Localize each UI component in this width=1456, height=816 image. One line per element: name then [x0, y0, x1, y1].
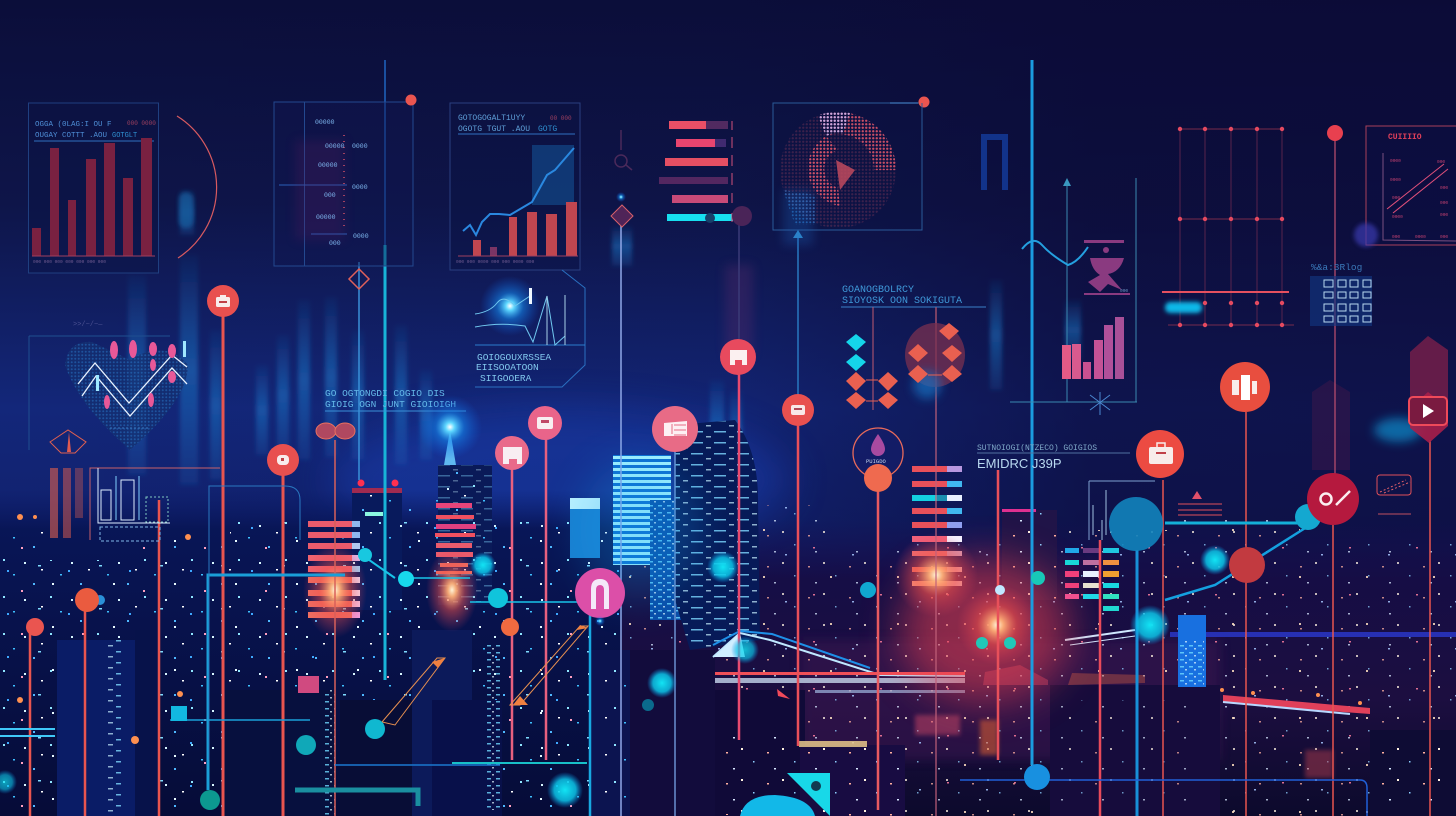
trend lines: [1387, 164, 1448, 213]
table cells: [1324, 280, 1371, 322]
combo labels: 000 000 0000 000 000 0000 000: [456, 259, 535, 265]
combo line: [463, 148, 574, 235]
scale labels: 0000: [352, 143, 368, 150]
panel: radial chart: [773, 96, 930, 245]
scale labels: 0000: [352, 184, 368, 191]
trend labels: 000: [1392, 234, 1400, 240]
small pink gate icon: [298, 676, 319, 693]
caption right of center: SUTNOIOGI(NTZECO) GOIGIOS: [977, 444, 1097, 453]
red disc: [1229, 547, 1265, 583]
horizontal bar list: [659, 121, 752, 226]
pin icon: badge: [267, 444, 299, 476]
diamond marker left: [349, 269, 369, 289]
signal lines: [475, 296, 530, 314]
panel: line and column chart: 000: [1120, 288, 1128, 294]
chart 1 heading: OGGA (0LAG:I OU F: [35, 121, 112, 129]
trend heading: CUIIIIO: [1388, 133, 1422, 142]
table heading: %&a:3Rlog: [1311, 262, 1362, 273]
pink columns: [1062, 317, 1124, 379]
scale labels: 00000: [325, 143, 345, 150]
lamp lights: [17, 514, 1362, 705]
pink nodes: [104, 340, 176, 409]
purple water: [800, 640, 1220, 760]
teal wave: [1022, 241, 1088, 265]
cyan pill: [1165, 302, 1202, 313]
stacked bars: left tower: [308, 521, 360, 618]
orange glow: beacon bars: [426, 548, 478, 632]
trend labels: 000: [1440, 212, 1448, 218]
triangle stack icon: [1178, 491, 1222, 515]
blue pill mark: [179, 192, 193, 228]
matrix heading: GOANOGBOLRCY: [842, 285, 914, 296]
panel: heart network: [29, 321, 188, 450]
stacked bars: colored grid: [1065, 548, 1119, 611]
water reflections: [915, 715, 1333, 778]
panel: dot lattice: [1162, 127, 1294, 327]
pin: card pink high: [528, 406, 562, 440]
pin: percent icon: [1307, 473, 1359, 525]
ambient blue glow behind city center: [330, 410, 790, 550]
striped tower: [613, 455, 690, 620]
pin: small orange: [501, 618, 519, 636]
trend labels: 0000: [1390, 177, 1401, 183]
faint background bars: [128, 190, 1081, 485]
mid heading: GIOIG OGN JUNT GIOIOIGH: [325, 399, 456, 410]
lower center towers: [590, 650, 1456, 816]
handwritten label: >>/~/~—: [73, 321, 103, 329]
note card icon: [1377, 475, 1411, 514]
chart 1 heading: GOTGLT: [112, 132, 137, 140]
circuit panel: [98, 468, 170, 541]
combo heading: GOTOGOGALT1UYY: [458, 114, 525, 123]
connector arrow tips: [432, 625, 588, 705]
pin: gate: [720, 339, 756, 375]
chart 1 heading: 000 0000: [127, 120, 156, 127]
panel: vertical scale: [274, 94, 416, 266]
radial inner ring: [808, 136, 840, 206]
central purple glows: [725, 265, 1448, 750]
faint outer disc: [780, 112, 896, 228]
pin dot: [918, 96, 930, 108]
stacked bars: center right: [912, 466, 962, 586]
bridge right: [983, 615, 1456, 714]
mid heading: [325, 388, 456, 410]
gauge and ladder icon: [50, 430, 86, 538]
infinity icon: [316, 423, 355, 439]
combo heading: [458, 114, 572, 134]
radial outer ring: [818, 112, 896, 170]
caption right of center: EMIDRC J39P: [977, 456, 1062, 471]
dim blue legs glyph: [981, 134, 1008, 190]
chart 1 heading: [35, 120, 156, 140]
orange glow: left bars: [303, 542, 367, 638]
radial blue corner: [783, 190, 815, 225]
city lights left: [0, 500, 620, 816]
pin: large left: [75, 588, 99, 612]
signal caption: GOIOGOUXRSSEA: [477, 352, 551, 363]
combo heading: 00 000: [550, 115, 572, 122]
ambient glow center: [580, 460, 700, 600]
stacked bars: beacon tower: [435, 503, 476, 574]
matrix heading: SIOYOSK OON SOKIGUTA: [842, 296, 962, 307]
combo bars: [473, 202, 577, 256]
pin: play hexagon: [1409, 392, 1448, 443]
trend labels: 000: [1440, 234, 1448, 240]
city lights right: [620, 500, 1456, 816]
scale labels: 000: [329, 240, 341, 247]
scale labels: 00000: [315, 119, 335, 126]
city base left: [0, 490, 620, 816]
caption right of center: [977, 444, 1130, 471]
rooftop tower with red lights: [352, 480, 402, 610]
panel: hexagonal signal: [475, 270, 585, 387]
zigzag lines: [78, 355, 187, 416]
panel: line and column chart: [1010, 178, 1137, 415]
heart footer lines: [110, 427, 150, 429]
city base right: [620, 520, 1456, 816]
signal caption: [476, 352, 551, 384]
signal glow: [480, 276, 540, 336]
radial light segment: [818, 112, 850, 136]
arrow up: [793, 230, 803, 238]
pin: droplet ring: [853, 428, 903, 492]
trophy glyph: [1084, 240, 1130, 295]
pin icon: briefcase top-left: [207, 285, 239, 317]
pin: magenta lock: [575, 568, 625, 626]
radial wedge: [836, 160, 855, 190]
pin: card center: [782, 394, 814, 426]
chart 1 heading: OUGAY COTTT .AOU: [35, 132, 107, 140]
panel: trend chart: [1354, 126, 1456, 247]
pin: card pink low: [495, 436, 529, 470]
scale labels: 00000: [316, 214, 336, 221]
bottom-left neon strips: [0, 706, 187, 794]
small panel near blue disc: [1089, 481, 1155, 540]
trend labels: 000: [1440, 185, 1448, 191]
spark ornaments: [1090, 392, 1110, 415]
matrix heading: [842, 285, 962, 307]
pin: droplet ring: PUIGDO: [866, 458, 887, 465]
diamonds: [846, 323, 962, 409]
trend labels: 000: [1437, 159, 1445, 165]
dotted heart: [65, 342, 188, 450]
scale labels: 0000: [353, 233, 369, 240]
pin: bars icon: [1220, 362, 1270, 412]
tall tower with beacon: [438, 430, 492, 605]
trend labels: 0000: [1390, 158, 1401, 164]
cyan nodes: [95, 418, 1422, 810]
combo heading: GOTG: [538, 125, 557, 134]
trend labels: 0000: [1415, 234, 1426, 240]
blue disc large: [1109, 497, 1163, 551]
pin dot: [406, 94, 416, 106]
scale labels: [315, 119, 369, 247]
lower left towers: [57, 630, 502, 816]
orange glow: center bars: [894, 533, 978, 617]
panel: data table: [1310, 262, 1372, 326]
combo heading: OGOTG TGUT .AOU: [458, 125, 530, 134]
trend labels: 0000: [1392, 214, 1403, 220]
signal caption: SIIGOOERA: [480, 373, 532, 384]
bottom cyan shape: [740, 795, 815, 816]
mid heading: GO OGTONGDI COGIO DIS: [325, 388, 445, 399]
trend labels: [1390, 158, 1448, 240]
panel: bar chart 1: [28, 103, 158, 273]
trend labels: 000: [1392, 195, 1400, 201]
dark main tower: [675, 420, 760, 650]
beacon glow: [418, 395, 482, 459]
blue spark: [616, 192, 626, 202]
panel: combo chart: [450, 103, 580, 270]
orange glow: right spark: [957, 585, 1037, 665]
pin: trend pin top: [1327, 125, 1343, 141]
chart 1 axis labels: 000 000 000 000 000 000 000: [33, 259, 106, 265]
right tower: [1002, 509, 1057, 600]
lattice dots: [1178, 127, 1284, 327]
red glow behind right city: [900, 558, 1070, 702]
small bright tower: [570, 498, 600, 558]
diamond marker center: [611, 205, 633, 227]
trend labels: 000: [1440, 200, 1448, 206]
bridge left: [713, 631, 965, 747]
trend glow: [1354, 223, 1378, 247]
pin: document: [652, 406, 698, 452]
chart 1 bars: [32, 138, 152, 256]
cyan triangle card: [787, 773, 830, 816]
city skyline: [0, 420, 1456, 816]
signal caption: EIISOOATOON: [476, 362, 539, 373]
pin: small left: [26, 618, 44, 636]
scale labels: 00000: [318, 162, 338, 169]
panel: diamond matrix: [841, 285, 986, 410]
dim magnifier glyph: [615, 130, 632, 170]
arc gauge: [177, 116, 217, 258]
pin: briefcase right: [1136, 430, 1184, 478]
scale labels: 000: [324, 192, 336, 199]
